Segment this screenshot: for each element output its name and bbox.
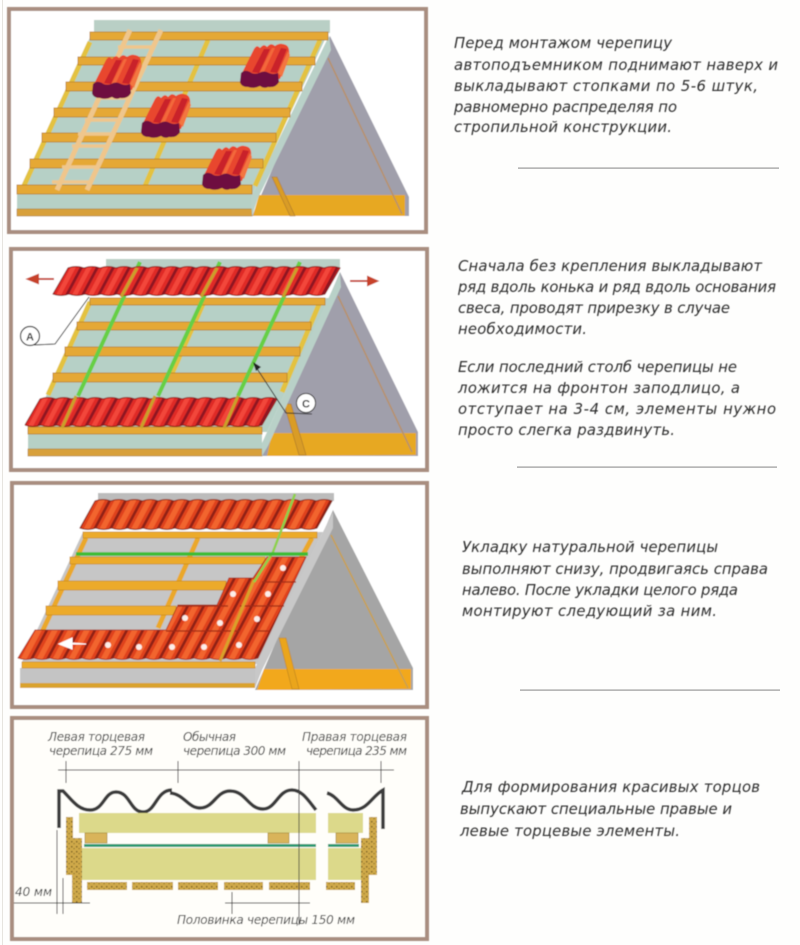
dimension labels: Правая торцевая [302,730,407,744]
side posts [66,817,377,903]
text: step 2: ложится на фронтон заподлицо, а [457,380,740,397]
arrow: white leftward [59,638,86,649]
dimension labels: Левая торцевая [47,730,145,744]
gable end of roof [252,36,409,216]
tile row along eaves [25,396,277,428]
dimension labels: Половинка черепицы 150 мм [177,913,355,927]
callout A [20,297,89,346]
bottom planks [87,882,355,890]
roof underlay and ridge [17,20,331,216]
tile row along ridge [53,266,340,297]
arrow: right [350,277,377,285]
text: step 2: Если последний столб черепицы не [458,359,737,376]
top dimension line [58,761,394,783]
callout C [253,362,316,414]
text: step 1: Перед монтажом черепицу [454,35,672,52]
dimension labels [15,730,407,927]
tile stacks [92,44,290,190]
dimension labels: 40 мм [15,885,52,899]
text: step 4: левые торцевые элементы. [459,823,680,840]
text: step 3: налево. После укладки целого ряда [462,582,738,599]
battens [17,32,328,194]
text: step 2: просто слегка раздвинуть. [458,422,675,439]
text: step 3: монтируют следующий за ним. [462,603,717,620]
text: step 2: необходимости. [458,321,587,338]
panel: step 2 ridge and eaves rows [11,249,427,470]
text: step 2 [457,258,776,439]
gable end of roof [262,272,418,456]
panel: step 1 stacks of tile on the roof [9,9,426,232]
dimension labels: черепица 275 мм [49,744,153,758]
callout A: A [26,332,34,344]
text: step 3: выполняют снизу, продвигаясь справа [462,561,768,578]
panel: step 4 end tile cross-section [12,718,427,939]
upper yellow board [79,813,363,833]
lower dimension lines [14,892,310,914]
callout C: C [302,398,310,410]
text: step 2: свеса, проводят прирезку в случае [458,300,730,317]
dimension labels: черепица 235 мм [306,744,407,758]
gable end of roof [255,510,413,690]
laid tiles stepped field [18,557,306,661]
ladder [52,30,161,190]
battens [28,298,325,434]
text: step 1: автоподъемником поднимают наверх и [454,57,778,74]
text: step 1: выкладывают стопками по 5-6 штук, [454,78,758,95]
text: step 3: Укладку натуральной черепицы [462,539,718,556]
lower yellow board [81,848,361,880]
battens [22,532,317,668]
text: step 4 [459,779,760,840]
roof underlay and ridge [20,493,334,688]
green membrane [84,844,359,847]
tile wave profile [59,790,383,829]
text: step 2: Сначала без крепления выкладывают [458,258,762,275]
green chalk lines [78,262,300,396]
text: step 1 [453,35,778,136]
text: step 1: стропильной конструкции. [454,119,672,136]
text: step 3 [462,539,768,620]
small battens [85,833,358,843]
text: step 2: ряд вдоль конька и ряд вдоль основания [457,279,776,296]
rafters [42,538,312,632]
rafters [48,302,320,395]
arrow: left [28,275,54,283]
break guide and verticals [57,761,299,925]
dimension labels: черепица 300 мм [183,744,286,758]
dimension labels: Обычная [183,730,236,744]
green chalk lines [76,494,308,582]
tile row along ridge [80,500,332,530]
text: step 1: равномерно распределяя по [453,99,677,116]
text: step 4: выпускают специальные правые и [460,801,732,818]
text: step 2: отступает на 3-4 см, элементы нужно [458,401,776,418]
roof underlay and ridge [28,259,341,456]
text: step 4: Для формирования красивых торцов [461,779,760,796]
white numbers markers [105,565,286,650]
panel: step 3 laying tile from bottom right [12,483,427,707]
rafters [22,40,320,190]
